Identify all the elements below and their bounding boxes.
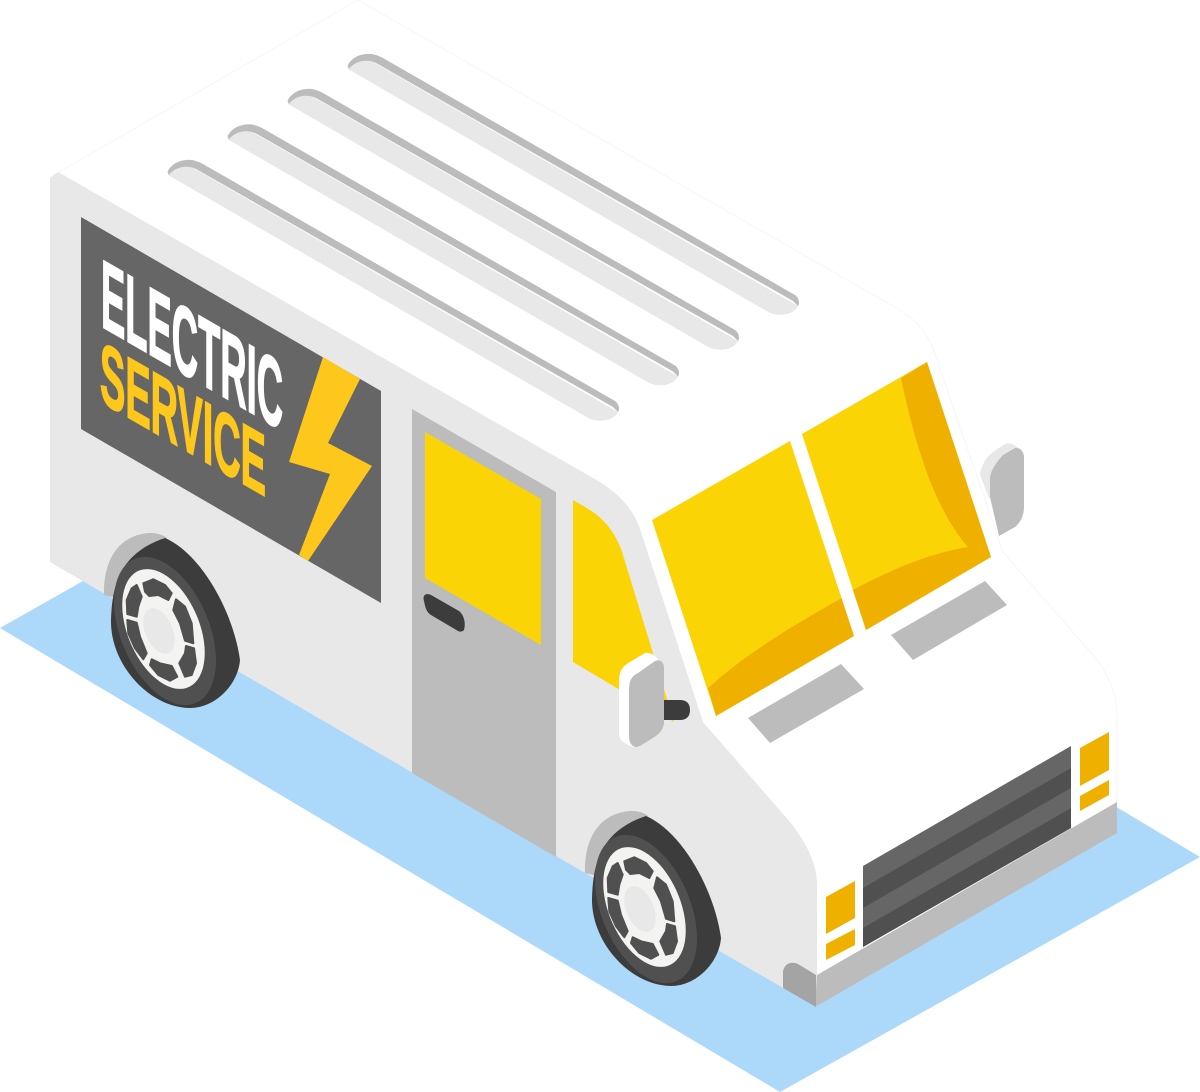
rear corner bumper piece: [783, 963, 816, 1007]
front bumper: [815, 802, 1117, 1007]
front wheel arch: [585, 811, 648, 878]
front grille: [863, 746, 1071, 947]
right headlights: [1080, 732, 1109, 811]
rim: [603, 828, 686, 986]
roof vent 3: [288, 89, 739, 350]
hub: [140, 591, 180, 666]
mirror housing: [619, 653, 658, 747]
tyre inner band: [114, 534, 216, 728]
door window: [425, 432, 541, 645]
windshield left pane: [652, 441, 854, 716]
rear wheel arch: [104, 533, 167, 600]
mirror arm: [660, 700, 690, 720]
ground: light blue parking area: [0, 390, 1200, 1092]
roof vent 4: [348, 54, 799, 315]
sliding door: [412, 409, 556, 857]
icon: lightning bolt: [289, 357, 372, 561]
rim openings: [127, 579, 196, 681]
tyre outer: [592, 816, 721, 986]
right wing mirror: [980, 443, 1024, 536]
wiper right: [891, 581, 1007, 660]
side advertising panel: SERVICE: [100, 322, 266, 515]
rim openings: [608, 857, 677, 959]
windshield: [652, 362, 991, 716]
side advertising panel: [81, 217, 381, 603]
hub: [622, 869, 660, 944]
front wheel: [592, 812, 721, 1006]
left wing mirror: [619, 653, 690, 747]
tyre inner band: [595, 812, 697, 1006]
rear wheel: [111, 534, 240, 728]
roof vent 1: [168, 160, 619, 421]
rim: [122, 550, 205, 708]
cab side window: [573, 500, 674, 722]
roof vent 2: [228, 124, 679, 385]
door handle: [424, 594, 465, 632]
wiper left: [748, 664, 864, 743]
tyre outer: [111, 538, 240, 708]
van side body (light grey): [50, 172, 817, 1007]
left headlights: [826, 881, 855, 960]
mirror glass: [629, 660, 664, 747]
windshield right pane: [802, 362, 991, 630]
van roof and front body (white): [52, 0, 1117, 978]
side advertising panel: ELECTRIC: [101, 239, 283, 452]
